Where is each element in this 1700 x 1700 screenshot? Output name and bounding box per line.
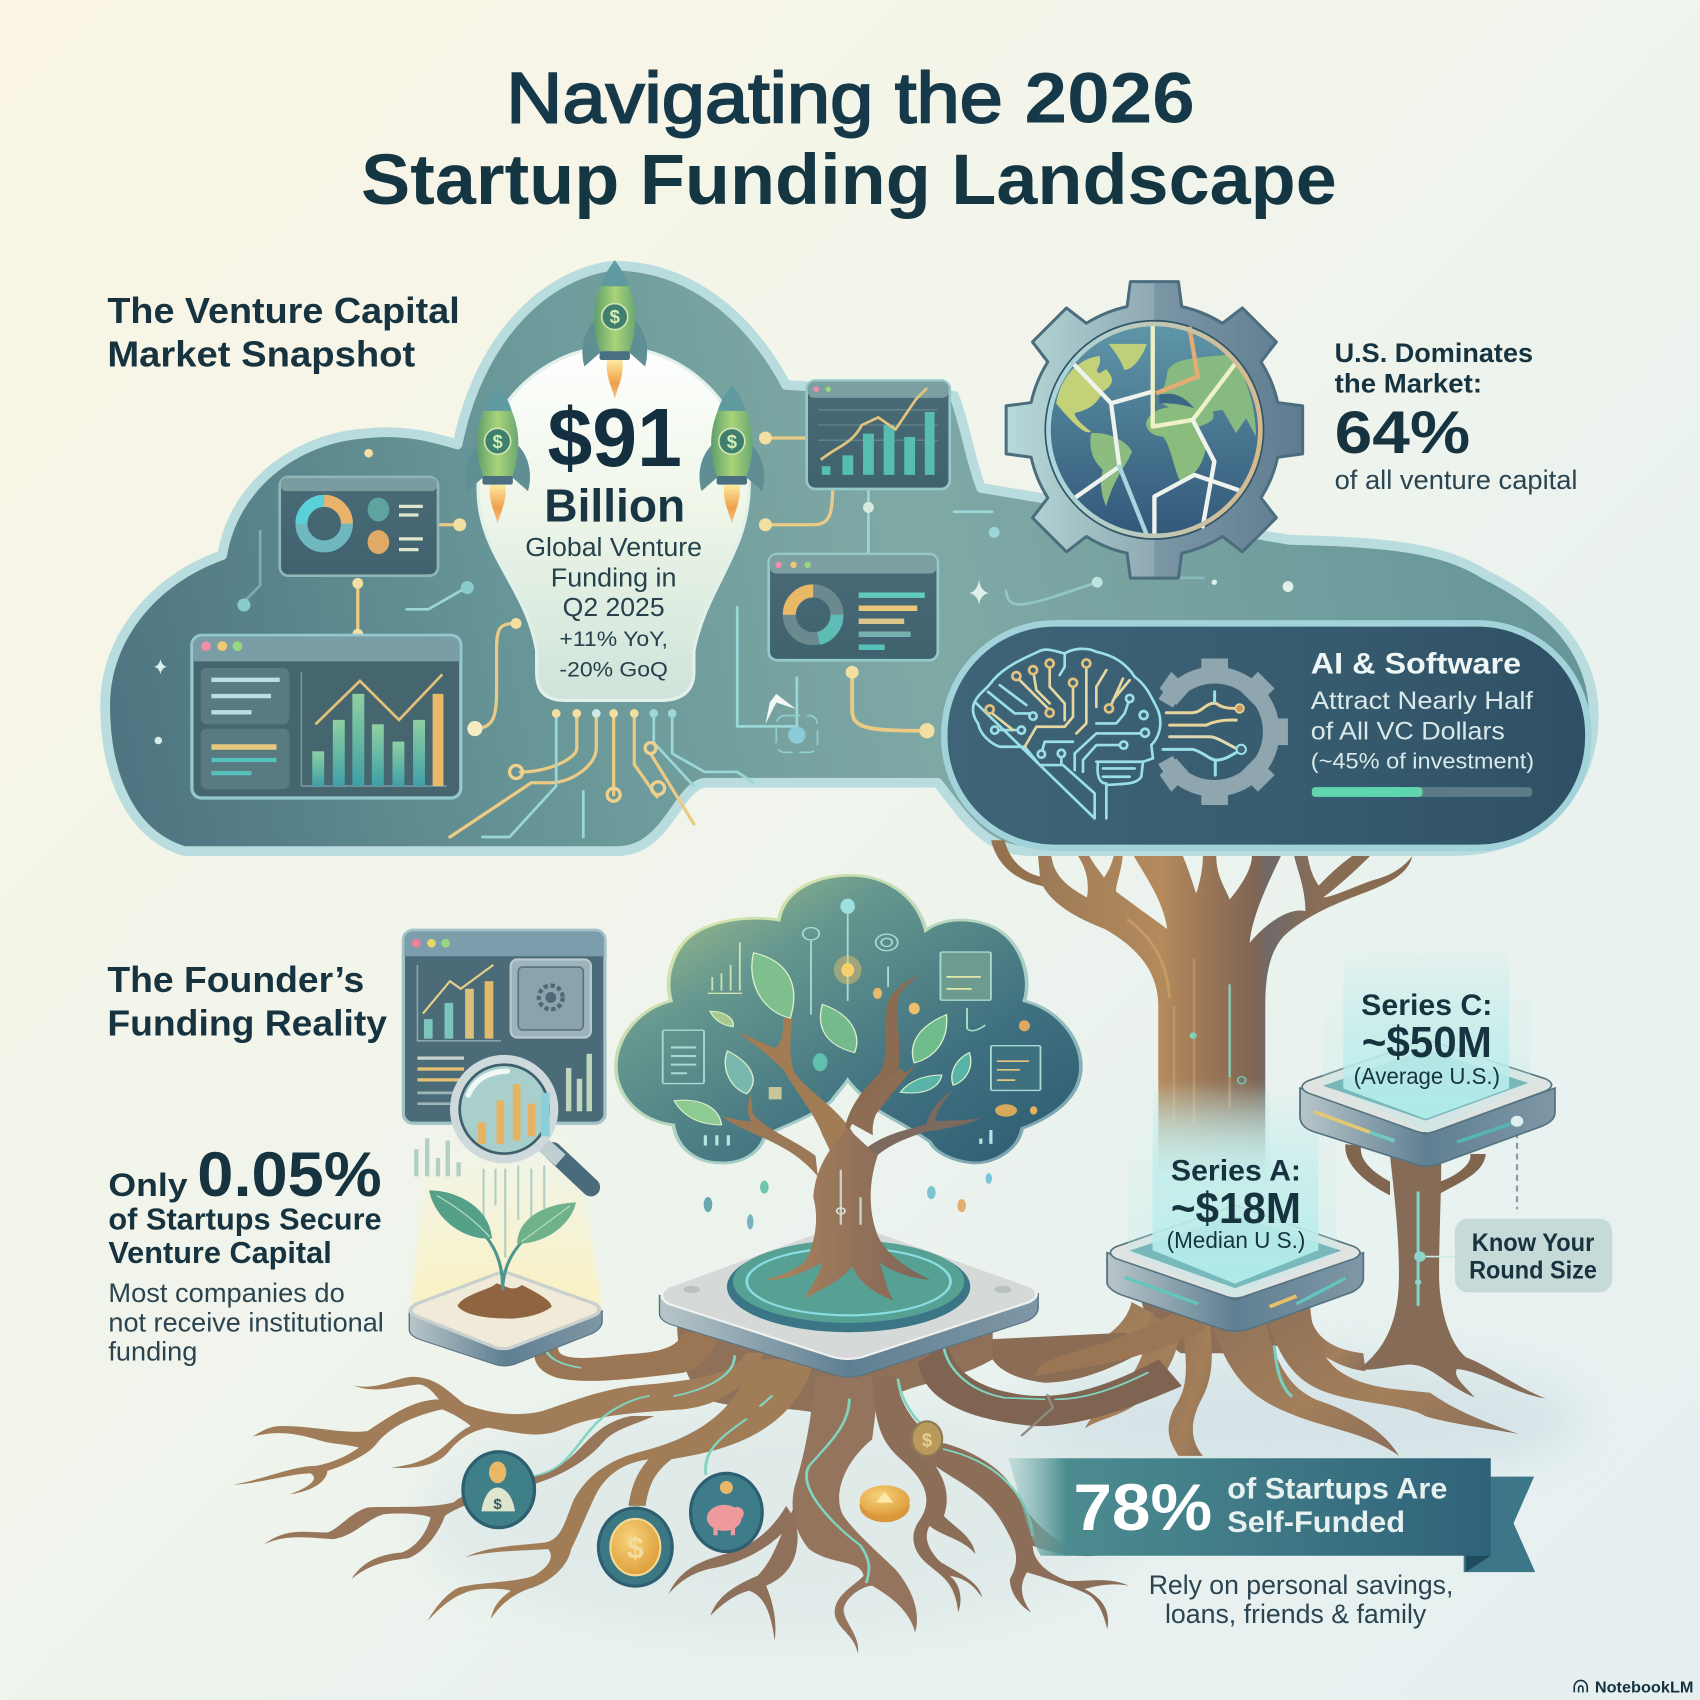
branches [721, 1094, 818, 1177]
text: only 0.05 percent: 0.05% [197, 1140, 382, 1210]
icon: falling data bars [416, 1138, 544, 1258]
bulb description: -20% GoQ [559, 659, 668, 682]
text: only 0.05 percent [108, 1140, 384, 1367]
text: self funded detail: Rely on personal savings, [1149, 1569, 1453, 1600]
hologram: series C: Series C: [1361, 990, 1492, 1022]
heading: founder's funding reality: Funding Reality [107, 1003, 387, 1043]
icon: magnifier [452, 1057, 591, 1187]
heading: founder's funding reality [107, 960, 387, 1043]
title: Startup Funding Landscape [361, 140, 1337, 220]
text: AI share: of All VC Dollars [1311, 717, 1505, 745]
panel: second donut card [769, 554, 938, 660]
metric: 78 percent: 78% [1073, 1471, 1212, 1545]
text: U.S. dominates: 64% [1335, 398, 1470, 466]
tree: small series C tree [1345, 1132, 1546, 1399]
brand mark: NotebookLM [1595, 1679, 1693, 1696]
text: only 0.05 percent: not receive institutional [108, 1306, 384, 1337]
rocket right [699, 385, 764, 524]
rocket top: $ [610, 306, 620, 327]
root: lower left [264, 1416, 654, 1579]
tree trunk [764, 1128, 930, 1301]
text: AI share: (~45% of investment) [1311, 749, 1534, 774]
text: U.S. dominates [1335, 337, 1577, 495]
bulb description: Global Venture [525, 534, 702, 562]
root: right [872, 1376, 1129, 1629]
roots: series A [1036, 1282, 1519, 1456]
bulb description: Funding in [551, 565, 677, 593]
tree: central tree [616, 875, 1081, 1204]
bulb description [525, 534, 702, 682]
panel: AI and software [944, 623, 1588, 848]
rocket left: $ [493, 431, 503, 452]
circuit traces [358, 438, 927, 837]
coin: person: $ [493, 1496, 502, 1513]
root: long left [233, 1353, 763, 1494]
text: only 0.05 percent: Only [108, 1167, 188, 1203]
title: Navigating the [506, 59, 1003, 139]
progress bar [1312, 787, 1532, 797]
panel: analytics window [403, 930, 605, 1123]
callout: know your round size: Round Size [1469, 1256, 1597, 1284]
metric: $91 billion: $91 [548, 392, 682, 484]
coin: person [463, 1452, 535, 1528]
hologram: series A: (Median U S.) [1167, 1227, 1305, 1253]
hologram: series C: ~$50M [1362, 1019, 1492, 1067]
panel: market cloud [105, 266, 1594, 851]
rocket top [582, 260, 647, 399]
icon: raindrops [704, 1173, 992, 1229]
platform: central [659, 1128, 1038, 1377]
sparkles [154, 579, 989, 674]
leaves [674, 953, 971, 1125]
rocket right: $ [727, 431, 737, 452]
panel: funding light bulb [478, 347, 749, 700]
canopy [616, 875, 1081, 1163]
banner text [1227, 1473, 1447, 1539]
hologram: series C: (Average U.S.) [1354, 1063, 1500, 1089]
glow: sprout light [412, 1128, 602, 1306]
tree: large series A tree [991, 840, 1519, 1456]
text: U.S. dominates: U.S. Dominates [1335, 337, 1533, 368]
coin: gold flat [860, 1485, 910, 1522]
callout: know your round size: Know Your [1472, 1229, 1595, 1257]
title [361, 59, 1337, 220]
text: only 0.05 percent: of Startups Secure [108, 1203, 382, 1236]
text: self funded detail [1149, 1569, 1453, 1629]
ground shadow [423, 1355, 1583, 1637]
icon: ai gear [1158, 658, 1288, 805]
icon: root coins [463, 1421, 942, 1586]
panel: small donut card [280, 477, 438, 576]
title: 2026 [1025, 59, 1195, 139]
heading: venture capital snapshot: Market Snapshot [107, 334, 415, 374]
callout: know your round size [1455, 1219, 1612, 1292]
icon: globe in gear [1006, 282, 1303, 578]
text: only 0.05 percent: Venture Capital [108, 1237, 332, 1270]
hologram: series A: ~$18M [1171, 1185, 1301, 1233]
platform: sprout [409, 1190, 602, 1366]
coin: piggy bank [691, 1473, 762, 1551]
banner: 78 percent self funded [1008, 1458, 1535, 1572]
seedling [429, 1190, 576, 1290]
text: only 0.05 percent: funding [108, 1336, 197, 1367]
panel: large dashboard [192, 635, 461, 798]
banner text: Self-Funded [1227, 1507, 1405, 1539]
platform: series C [1300, 1040, 1555, 1166]
coin: small: $ [922, 1429, 932, 1450]
root: toward dollar coin [428, 1359, 815, 1621]
bulb description: +11% YoY, [559, 628, 668, 651]
heading: venture capital snapshot: The Venture Capital [107, 291, 460, 331]
text: AI share [1311, 648, 1534, 774]
text: only 0.05 percent: Most companies do [108, 1277, 345, 1308]
panel: growth chart card [807, 381, 950, 489]
rocket left [465, 385, 530, 524]
coin: dollar: $ [627, 1532, 644, 1565]
heading: founder's funding reality: The Founder’s [107, 960, 364, 1000]
text: AI share: AI & Software [1311, 648, 1521, 680]
hologram: series A [1128, 1084, 1337, 1298]
hologram: series C [1323, 943, 1531, 1133]
platform: series A [1107, 1205, 1363, 1331]
banner text: of Startups Are [1227, 1473, 1447, 1505]
bulb description: Q2 2025 [563, 594, 665, 622]
roots: central tree [233, 1299, 1205, 1654]
coin: dollar [598, 1508, 672, 1586]
root to sprout [534, 1333, 717, 1381]
canopy data icons [663, 913, 1040, 1146]
hologram: series A: Series A: [1171, 1156, 1301, 1188]
icon: brain [973, 649, 1160, 818]
text: U.S. dominates: the Market: [1335, 367, 1482, 398]
text: U.S. dominates: of all venture capital [1335, 464, 1577, 495]
metric: $91 billion: Billion [544, 479, 685, 531]
metric: $91 billion [544, 392, 685, 531]
root: center [793, 1376, 917, 1654]
icon: rockets [465, 260, 764, 524]
text: AI share: Attract Nearly Half [1311, 687, 1533, 715]
text: self funded detail: loans, friends & family [1165, 1598, 1427, 1629]
heading: venture capital snapshot [107, 291, 460, 374]
data wires [534, 1339, 1148, 1582]
coin: small [912, 1421, 942, 1456]
